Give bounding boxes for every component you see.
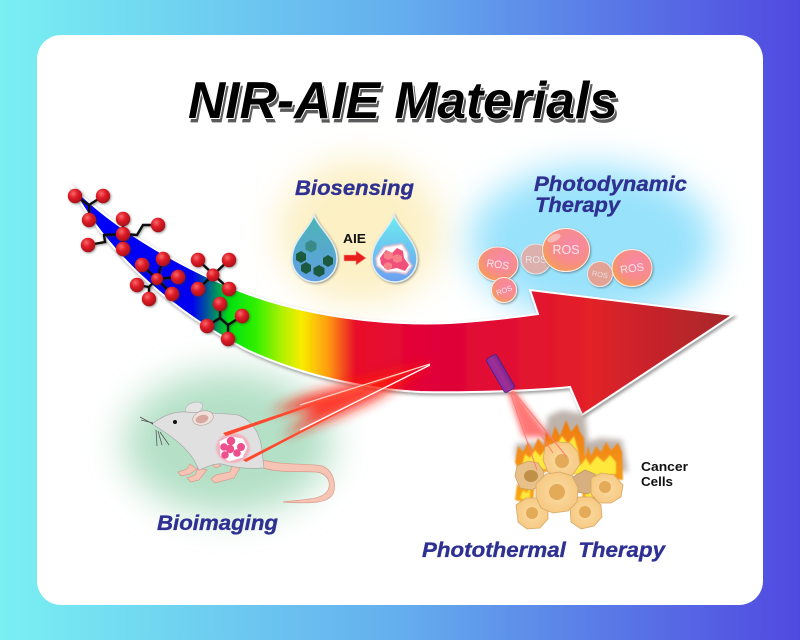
tail	[263, 460, 335, 503]
cell center	[536, 472, 578, 513]
ROS bubble large: ROS	[552, 243, 580, 257]
ear back	[184, 400, 204, 416]
label: Photodynamic Therapy: Therapy	[535, 193, 621, 217]
ROS bubble faded: ROS	[525, 255, 547, 266]
smoke	[515, 410, 628, 472]
icon: laser pen	[486, 354, 515, 393]
text: Cancer Cells	[641, 460, 688, 489]
label: Photodynamic Therapy	[534, 172, 687, 217]
biosensing glow	[278, 160, 442, 304]
ROS bubble right	[612, 250, 652, 286]
title: NIR-AIE Materials	[188, 72, 618, 130]
molecule 4	[191, 253, 236, 296]
ROS bubble small right	[588, 262, 612, 286]
label: Bioimaging: Bioimaging	[157, 511, 278, 535]
ROS bubble right: ROS	[619, 261, 645, 277]
text: AIE: AIE	[343, 231, 366, 246]
label: Biosensing: Biosensing	[295, 176, 414, 200]
whiskers	[140, 417, 169, 446]
cell lower right	[570, 497, 602, 529]
flames yellow	[520, 436, 616, 503]
rainbow arrow	[70, 184, 733, 415]
flames orange	[515, 420, 623, 505]
feet	[178, 461, 240, 483]
body	[152, 412, 264, 470]
cell back left	[515, 461, 544, 490]
label: Photothermal Therapy: Photothermal Therapy	[422, 538, 666, 562]
cancer cells with flames	[515, 410, 628, 529]
ROS bubble large	[542, 228, 590, 272]
ROS bubble left: ROS	[486, 257, 510, 273]
molecule 5	[200, 297, 249, 346]
mouse	[140, 400, 335, 503]
icon: drop before AIE	[292, 215, 337, 282]
laser beams to mouse	[223, 363, 433, 462]
ROS bubble left	[478, 247, 518, 281]
ROS bubble small lower	[492, 278, 516, 302]
ear front	[191, 409, 215, 427]
cell right	[591, 473, 623, 503]
label: Photodynamic Therapy: Photodynamic	[534, 172, 687, 196]
title: NIR-AIE Materials	[190, 76, 620, 134]
molecule 2	[81, 212, 165, 256]
bioimaging glow	[124, 371, 332, 515]
cell back middle	[573, 470, 597, 494]
ROS bubble faded	[521, 244, 551, 274]
cell lower left	[516, 498, 548, 529]
photodynamic therapy glow	[470, 166, 714, 318]
molecules	[68, 189, 249, 346]
tumor	[216, 433, 250, 463]
molecule 3	[130, 252, 185, 306]
eye	[173, 420, 177, 424]
laser pen beam	[508, 390, 567, 470]
ROS bubble small lower: ROS	[495, 283, 513, 297]
molecule 1	[68, 189, 110, 227]
cell top	[543, 442, 580, 478]
ROS bubble small right: ROS	[591, 269, 609, 280]
text: Cancer Cells: Cells	[641, 475, 673, 489]
icon: drop after AIE	[372, 215, 417, 282]
text: Cancer Cells: Cancer	[641, 460, 688, 474]
ROS bubbles	[478, 228, 652, 302]
arrow: AIE	[344, 251, 366, 265]
